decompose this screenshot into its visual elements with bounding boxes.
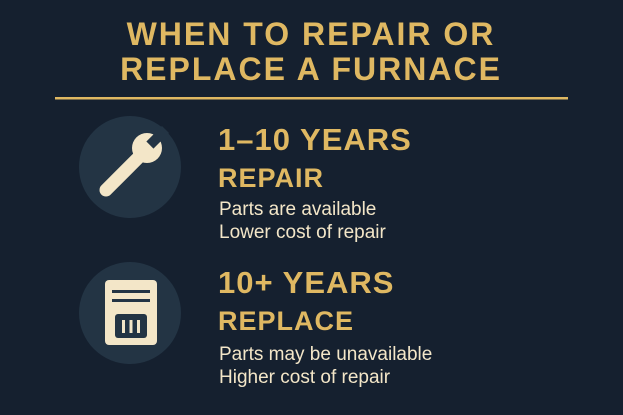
text block: repair (218, 122, 412, 243)
text block: repair: Lower cost of repair (219, 222, 387, 243)
text block: repair: Parts are available (219, 199, 376, 220)
text block: repair: REPAIR (218, 163, 324, 193)
text block: replace: REPLACE (218, 306, 354, 336)
text block: replace: Higher cost of repair (219, 367, 391, 388)
text block: repair: 1–10 YEARS (218, 122, 412, 157)
text block: replace: Parts may be unavailable (219, 344, 432, 365)
text block: replace (218, 265, 432, 388)
icon: wrench (79, 116, 181, 218)
title (120, 16, 502, 87)
title: REPLACE A FURNACE (120, 51, 502, 87)
icon: furnace (79, 262, 181, 364)
text block: replace: 10+ YEARS (218, 265, 394, 300)
title: WHEN TO REPAIR OR (127, 16, 495, 52)
